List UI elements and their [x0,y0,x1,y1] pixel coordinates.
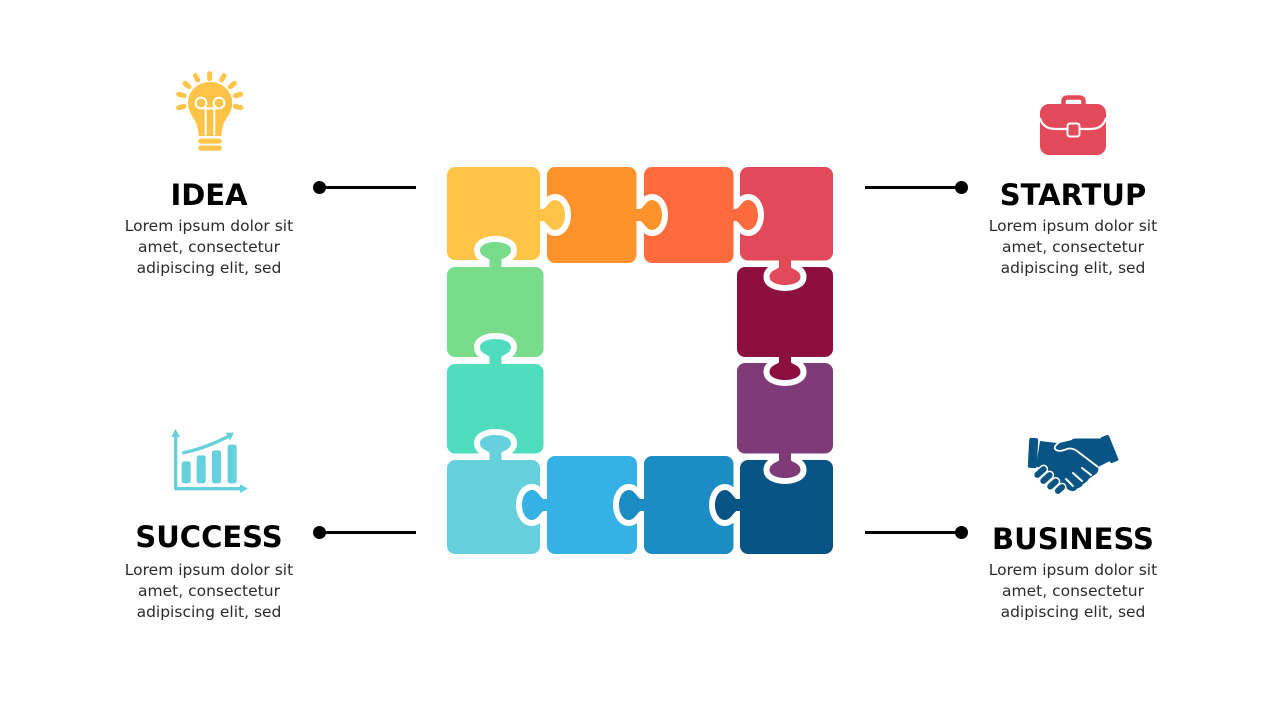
puzzle piece: purple [737,363,833,478]
connector: success [313,526,416,539]
connector: startup [865,181,968,194]
puzzle piece: green [447,242,544,357]
icon: growth chart [171,429,248,493]
puzzle piece: crimson [740,167,833,285]
puzzle piece: navy [715,460,833,554]
text block: success: SUCCESS [135,520,283,554]
text block: business: BUSINESS [992,522,1154,556]
text block: business: Lorem ipsum dolor sit [989,561,1157,579]
text block: success: adipiscing elit, sed [137,603,281,621]
text block: startup: amet, consectetur [1002,238,1144,256]
puzzle piece: orange [547,167,662,263]
icon: handshake [1028,434,1119,496]
text block: success [125,520,293,621]
text block: idea: adipiscing elit, sed [137,259,281,277]
puzzle piece: pale blue [447,435,540,554]
puzzle piece: sky blue [522,456,637,554]
text block: business: adipiscing elit, sed [1001,603,1145,621]
text block: success: Lorem ipsum dolor sit [125,561,293,579]
puzzle piece: red orange [644,167,758,263]
text block: idea [125,178,293,277]
text block: startup [989,178,1157,277]
puzzle piece: yellow [447,167,565,260]
text block: idea: IDEA [170,178,248,212]
connector: business [865,526,968,539]
puzzle ring [447,167,833,554]
text block: startup: adipiscing elit, sed [1001,259,1145,277]
text block: startup: Lorem ipsum dolor sit [989,217,1157,235]
puzzle piece: teal [447,339,544,454]
text block: business [989,522,1157,621]
text block: startup: STARTUP [1000,178,1146,212]
icon: light bulb [179,74,241,151]
connector: idea [313,181,416,194]
puzzle piece: medium blue [619,456,734,554]
text block: idea: Lorem ipsum dolor sit [125,217,293,235]
puzzle piece: maroon [737,267,833,380]
text block: business: amet, consectetur [1002,582,1144,600]
icon: briefcase [1040,98,1106,155]
text block: success: amet, consectetur [138,582,280,600]
text block: idea: amet, consectetur [138,238,280,256]
